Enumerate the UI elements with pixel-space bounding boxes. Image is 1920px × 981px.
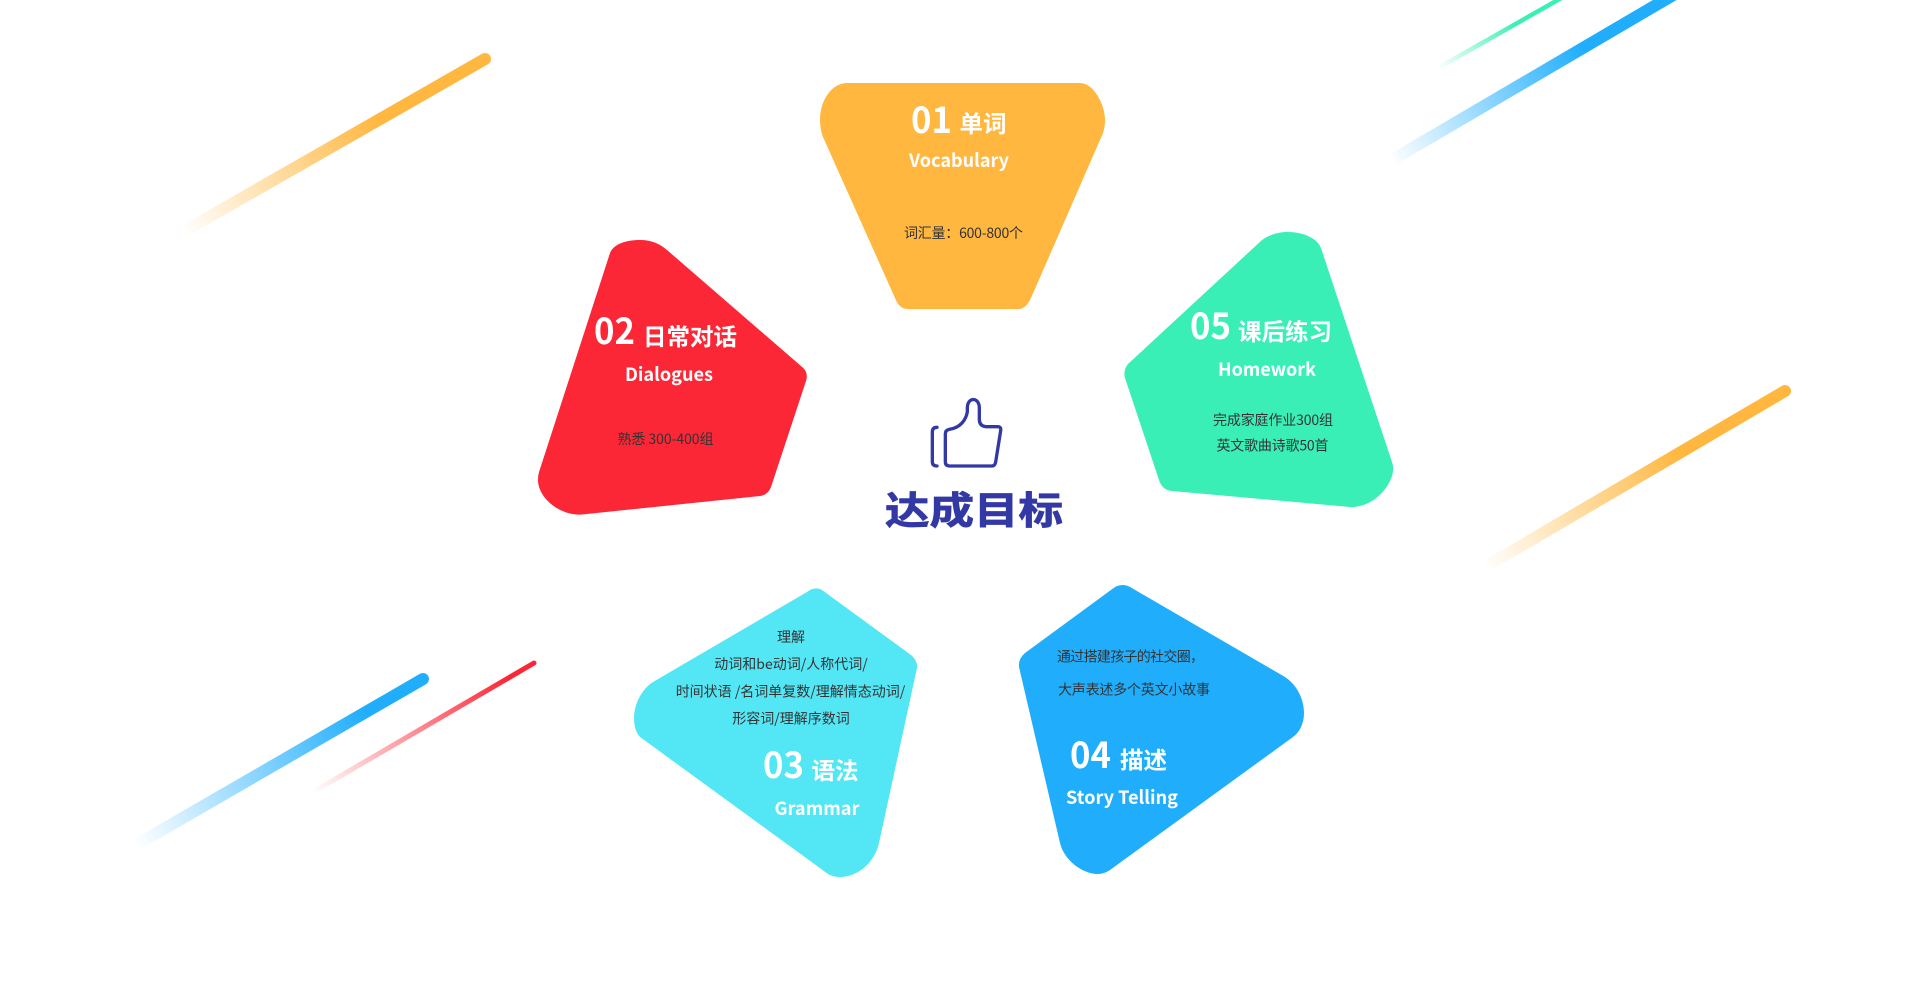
decorative streak: blue top right xyxy=(1392,0,1692,160)
center: goal xyxy=(885,399,1063,536)
heading Homework: Homework xyxy=(1218,356,1317,382)
number 02: 02 xyxy=(594,303,635,355)
heading Grammar: Grammar xyxy=(774,795,860,821)
panel: 04 story telling xyxy=(1019,585,1304,874)
number 03: 03 xyxy=(763,737,804,789)
shape: red petal xyxy=(538,240,807,515)
title 达成目标: 达成目标 xyxy=(885,481,1063,536)
number 01: 01 xyxy=(911,92,952,144)
shape: green petal xyxy=(1124,232,1393,507)
body text lines xyxy=(676,627,906,728)
heading 课后练习: 课后练习 xyxy=(1238,313,1332,347)
icon: thumbs up xyxy=(932,399,1001,466)
panel: 02 dialogues xyxy=(538,240,807,515)
shape: orange petal xyxy=(820,83,1105,309)
shape: blue petal xyxy=(1019,585,1304,874)
number 04: 04 xyxy=(1070,727,1111,779)
panel: 05 homework xyxy=(1124,232,1393,507)
number 05: 05 xyxy=(1190,298,1231,350)
decorative streak: blue bottom left xyxy=(136,679,423,845)
decorative streak: red bottom left xyxy=(313,663,534,792)
heading 描述: 描述 xyxy=(1120,742,1167,776)
body text line 1: 完成家庭作业300组 xyxy=(1213,410,1333,430)
body text: 词汇量：600-800个 xyxy=(904,223,1023,243)
body text line 2: 英文歌曲诗歌50首 xyxy=(1216,436,1328,456)
decorative streak: green top right xyxy=(1438,0,1572,68)
body text lines: 形容词/理解序数词 xyxy=(732,708,850,728)
heading Dialogues: Dialogues xyxy=(625,361,713,387)
decorative streak: orange top left xyxy=(181,59,485,233)
body text lines: 动词和be动词/人称代词/ xyxy=(714,654,868,674)
body text line 2: 大声表述多个英文小故事 xyxy=(1058,680,1210,700)
heading Vocabulary: Vocabulary xyxy=(908,147,1009,173)
shape: cyan petal xyxy=(634,588,917,877)
body text: 熟悉 300-400组 xyxy=(618,429,714,449)
decorative streak: orange right xyxy=(1485,391,1785,567)
body text lines: 时间状语 /名词单复数/理解情态动词/ xyxy=(676,682,906,702)
panel: 03 grammar xyxy=(634,588,917,877)
heading 语法: 语法 xyxy=(812,752,858,786)
body text line 1: 通过搭建孩子的社交圈， xyxy=(1057,646,1204,666)
panel: 01 vocabulary xyxy=(820,83,1105,309)
heading 单词: 单词 xyxy=(960,105,1006,139)
heading 日常对话: 日常对话 xyxy=(643,318,737,352)
body text lines: 理解 xyxy=(777,627,805,647)
heading Story Telling: Story Telling xyxy=(1066,784,1178,810)
